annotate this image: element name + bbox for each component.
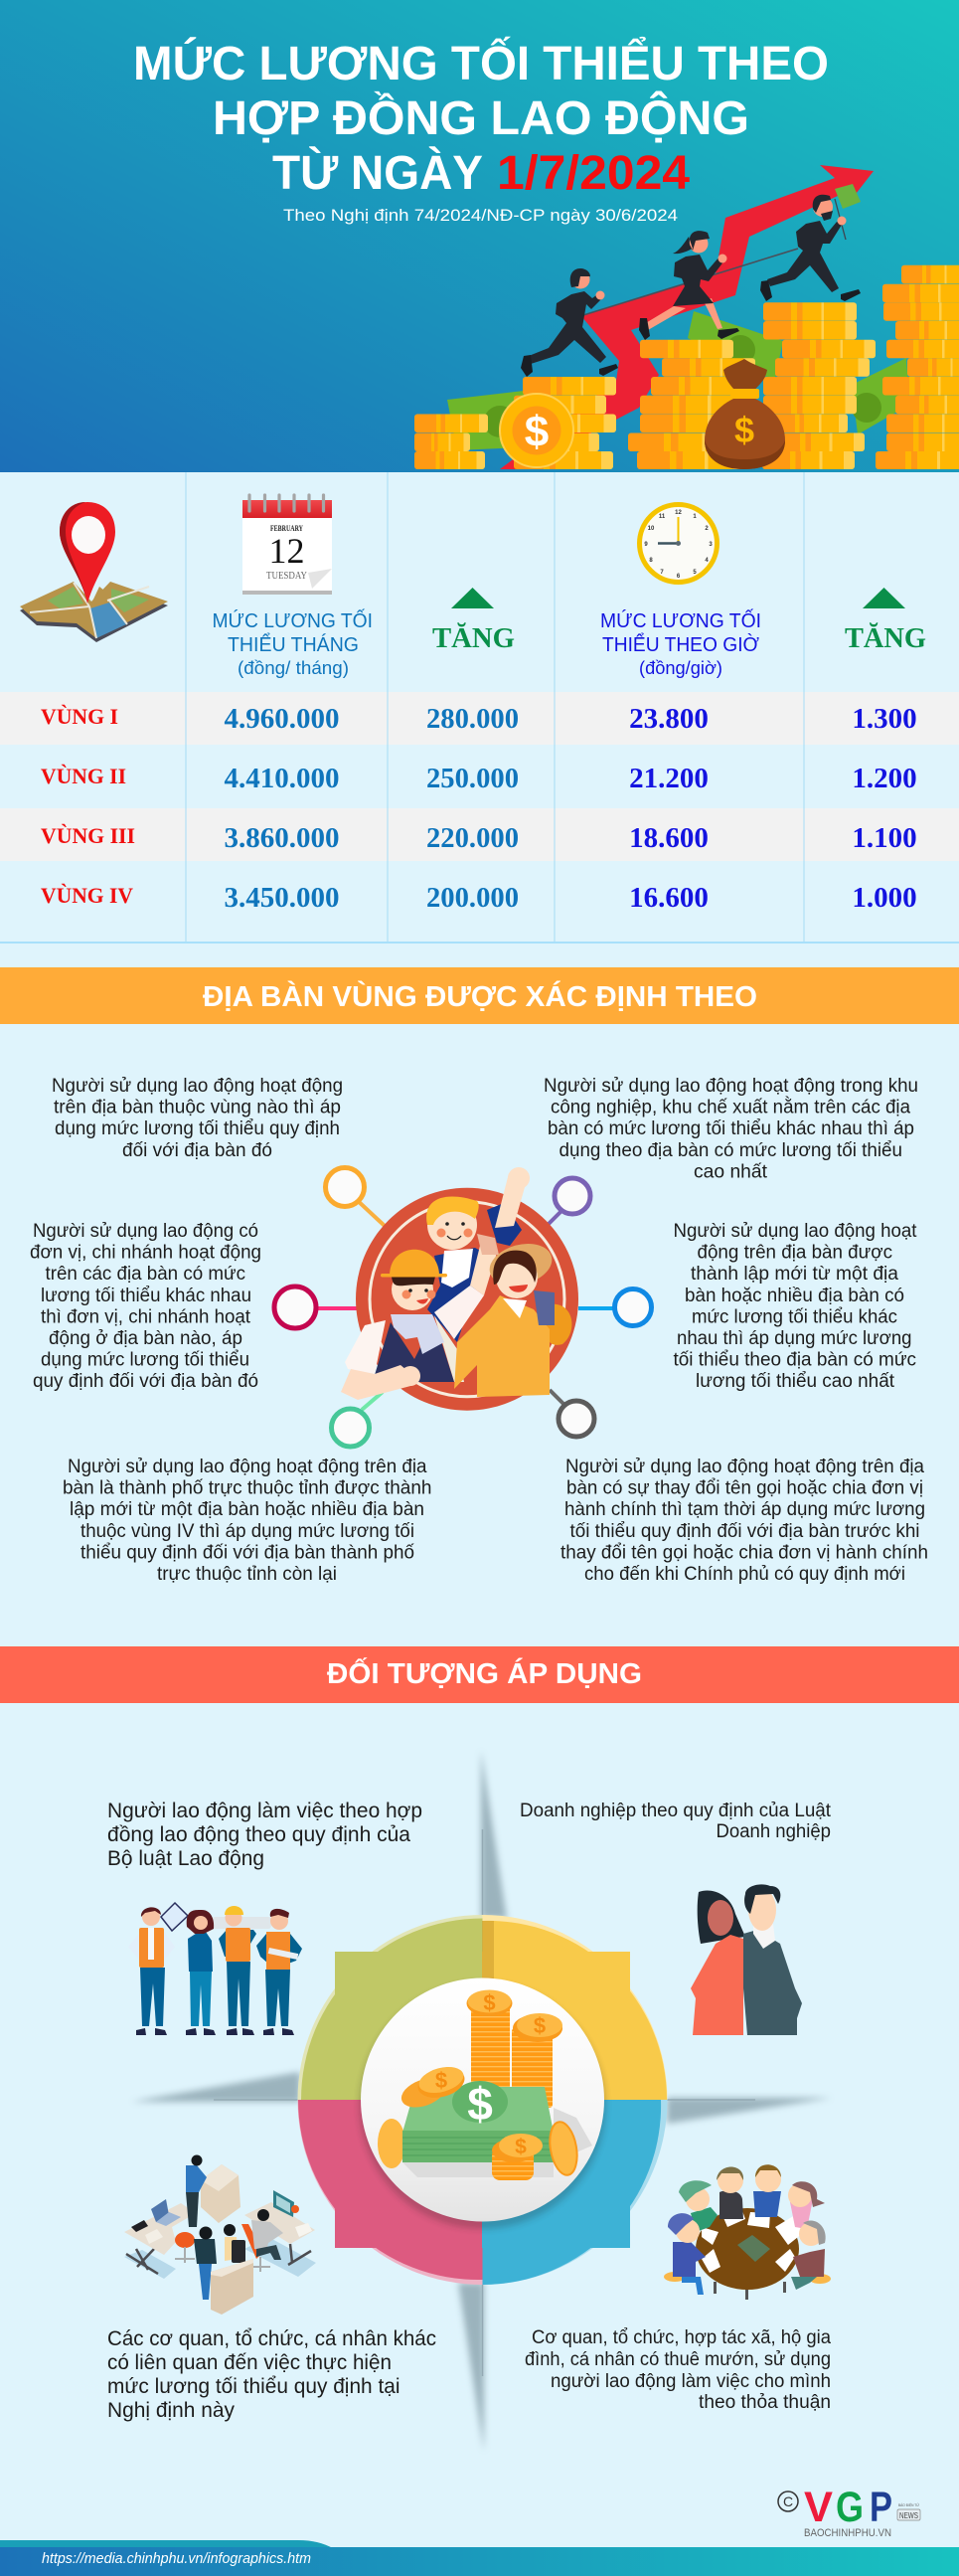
text block: rule 2: công nghiệp, khu chế xuất nằm trên các địa bbox=[551, 1097, 910, 1118]
text block: rule 5: Người sử dụng lao động hoạt động trên địa bbox=[68, 1457, 427, 1477]
text block: subject 1: Bộ luật Lao động bbox=[107, 1847, 264, 1870]
illustration: red growth arrow bbox=[500, 165, 874, 469]
row labels: regions bbox=[41, 704, 135, 908]
text block: rule 3: đơn vị, chi nhánh hoạt động bbox=[30, 1243, 261, 1264]
column values: hourly increase bbox=[852, 703, 917, 914]
text block: rule 6: cho đến khi Chính phủ có quy định mới bbox=[584, 1564, 905, 1585]
title: TỪ NGÀY bbox=[272, 145, 483, 200]
text block: subject 3: có liên quan đến việc thực hiện bbox=[107, 2351, 392, 2374]
column values: hourly wage: 21.200 bbox=[629, 763, 709, 794]
panel: applicable subjects diagram bbox=[107, 1750, 832, 2452]
icon: money and coins bbox=[378, 1990, 592, 2180]
column heading: hourly minimum wage bbox=[600, 608, 761, 678]
text block: rule 5 bbox=[63, 1457, 431, 1585]
title: 1/7/2024 bbox=[497, 147, 690, 200]
icon: meeting around table bbox=[664, 2164, 831, 2300]
icon: clock: 8 bbox=[649, 558, 653, 564]
table bbox=[0, 472, 959, 944]
column heading: increase (monthly) bbox=[432, 588, 515, 654]
text block: rule 2: Người sử dụng lao động hoạt động trong khu bbox=[544, 1076, 918, 1097]
quadrant: bottom left bbox=[298, 2100, 483, 2285]
column values: monthly wage: 4.410.000 bbox=[225, 763, 340, 794]
illustration: runner 1 bbox=[521, 268, 618, 377]
illustration: rope bbox=[583, 249, 798, 315]
text block: rule 6: hành chính thì tạm thời áp dụng mức lương bbox=[564, 1499, 925, 1520]
icon: money and coins: $ bbox=[467, 2078, 493, 2130]
divider shadows bbox=[131, 1750, 832, 2452]
VGP logo: P bbox=[870, 2484, 892, 2531]
section band: region determination bbox=[0, 967, 959, 1024]
worker 4 bbox=[256, 1909, 302, 2035]
icon: clock: 4 bbox=[705, 558, 709, 564]
icon: clock: 10 bbox=[648, 526, 655, 532]
connector nodes bbox=[274, 1167, 652, 1447]
worker 3 bbox=[219, 1906, 256, 2035]
column values: hourly increase: 1.300 bbox=[852, 703, 917, 735]
column values: monthly wage: 4.960.000 bbox=[225, 703, 340, 735]
title bbox=[133, 36, 829, 200]
icon: clock: 2 bbox=[705, 526, 709, 532]
column values: monthly increase: 250.000 bbox=[426, 763, 519, 794]
row labels: regions: VÙNG IV bbox=[41, 883, 133, 908]
worker in yellow sweater bbox=[454, 1237, 571, 1397]
column heading: monthly minimum wage: (đồng/ tháng) bbox=[238, 658, 349, 678]
text block: rule 4: động trên địa bàn được bbox=[698, 1243, 892, 1264]
column values: hourly increase: 1.100 bbox=[852, 822, 917, 854]
icon: clock: 11 bbox=[659, 514, 666, 520]
text block: rule 1: trên địa bàn thuộc vùng nào thì áp bbox=[54, 1098, 341, 1118]
VGP logo: C bbox=[783, 2493, 793, 2509]
text block: rule 3 bbox=[30, 1221, 261, 1392]
footer bar: https://media.chinhphu.vn/infographics.htm bbox=[42, 2550, 311, 2567]
row labels: regions: VÙNG II bbox=[41, 764, 126, 788]
panel: region rules hub diagram bbox=[30, 1076, 928, 1585]
column heading: monthly minimum wage: MỨC LƯƠNG TỐI bbox=[213, 608, 373, 632]
icon: clock bbox=[640, 505, 718, 583]
VGP logo: V bbox=[804, 2484, 833, 2531]
worker 2 bbox=[186, 1910, 216, 2035]
icon: office workplace bbox=[124, 2155, 316, 2315]
subtitle: Theo Nghị định 74/2024/NĐ-CP ngày 30/6/2024 bbox=[283, 206, 678, 225]
illustration: runner 3 with flag bbox=[760, 184, 861, 301]
column heading: hourly minimum wage: (đồng/giờ) bbox=[639, 658, 722, 678]
column values: hourly wage: 18.600 bbox=[629, 822, 709, 854]
column values: hourly wage: 16.600 bbox=[629, 882, 709, 914]
VGP logo: BÁO ĐIỆN TỬ bbox=[898, 2502, 919, 2507]
text block: rule 4: bàn hoặc nhiều địa bàn có bbox=[685, 1286, 904, 1306]
text block: rule 2: bàn có mức lương tối thiểu khác nhau thì áp bbox=[548, 1118, 914, 1139]
text block: rule 1: dụng mức lương tối thiểu quy định bbox=[55, 1118, 340, 1139]
text block: rule 5: lập mới từ một địa bàn hoặc nhiều địa bàn bbox=[70, 1499, 424, 1520]
illustration: runner 2 bbox=[639, 231, 739, 340]
text block: rule 3: thì đơn vị, chi nhánh hoạt bbox=[41, 1306, 251, 1327]
illustration: money bag: $ bbox=[734, 410, 754, 450]
icon: map with location pin bbox=[20, 502, 168, 642]
text block: rule 6: bàn có sự thay đổi tên gọi hoặc chia đơn vị bbox=[566, 1478, 923, 1499]
text block: rule 3: trên các địa bàn có mức bbox=[46, 1264, 245, 1285]
column heading: hourly minimum wage: MỨC LƯƠNG TỐI bbox=[600, 608, 761, 632]
text block: subject 3: Nghị định này bbox=[107, 2399, 235, 2422]
text block: subject 2: Doanh nghiệp bbox=[716, 1821, 831, 1842]
column heading: monthly minimum wage: THIỂU THÁNG bbox=[228, 633, 359, 656]
icon: calendar: TUESDAY bbox=[266, 570, 307, 582]
text block: rule 2 bbox=[544, 1076, 918, 1182]
section band: applicable subjects: ĐỐI TƯỢNG ÁP DỤNG bbox=[327, 1656, 642, 1690]
column values: monthly increase: 280.000 bbox=[426, 703, 519, 735]
illustration: banknotes bbox=[447, 311, 909, 450]
icon: calendar bbox=[242, 495, 332, 595]
worker in overalls bbox=[341, 1234, 499, 1400]
text block: subject 2 bbox=[520, 1801, 832, 1842]
icon: clock: 1 bbox=[693, 514, 697, 520]
illustration: gold coin bbox=[500, 394, 573, 467]
icon: clock: 3 bbox=[709, 542, 713, 548]
section band: applicable subjects bbox=[0, 1646, 959, 1703]
column heading: monthly minimum wage bbox=[213, 608, 373, 678]
text block: rule 3: Người sử dụng lao động có bbox=[33, 1221, 258, 1242]
text block: rule 3: quy định đối với địa bàn đó bbox=[33, 1371, 258, 1392]
text block: rule 5: thiểu quy định đối với địa bàn thành phố bbox=[80, 1542, 414, 1563]
quadrant: top left bbox=[298, 1915, 483, 2100]
text block: rule 6: thay đổi tên gọi hoặc chia đơn vị hành chính bbox=[560, 1542, 928, 1563]
text block: subject 4: Cơ quan, tổ chức, hợp tác xã, hộ gia bbox=[532, 2327, 831, 2348]
icon: money and coins: $ bbox=[515, 2136, 527, 2158]
VGP logo bbox=[778, 2484, 920, 2539]
column values: monthly wage bbox=[225, 703, 340, 914]
text block: rule 2: cao nhất bbox=[694, 1161, 768, 1182]
central illustration: three workers bbox=[341, 1167, 578, 1411]
text block: subject 3 bbox=[107, 2327, 436, 2422]
text block: subject 2: Doanh nghiệp theo quy định của Luật bbox=[520, 1801, 832, 1821]
text block: subject 3: Các cơ quan, tổ chức, cá nhân khác bbox=[107, 2327, 436, 2350]
column heading: hourly minimum wage: THIỂU THEO GIỜ bbox=[602, 633, 759, 656]
illustration: money bag bbox=[705, 359, 785, 469]
text block: rule 1: đối với địa bàn đó bbox=[122, 1140, 272, 1161]
text block: rule 3: lương tối thiểu khác nhau bbox=[41, 1286, 251, 1306]
column values: monthly increase: 220.000 bbox=[426, 822, 519, 854]
text block: subject 1: đồng lao động theo quy định của bbox=[107, 1823, 410, 1846]
icon: clock: 5 bbox=[693, 570, 697, 576]
text block: rule 4: mức lương tối thiểu khác bbox=[692, 1306, 897, 1327]
column heading: increase (hourly): TĂNG bbox=[845, 623, 926, 654]
icon: clock: 9 bbox=[644, 542, 648, 548]
icon: clock: 12 bbox=[675, 510, 682, 516]
text block: subject 1: Người lao động làm việc theo hợp bbox=[107, 1800, 422, 1822]
icon: calendar: 12 bbox=[268, 531, 304, 571]
title: HỢP ĐỒNG LAO ĐỘNG bbox=[213, 90, 749, 145]
text block: rule 4: thành lập mới từ một địa bbox=[691, 1264, 898, 1285]
text block: rule 4: lương tối thiểu cao nhất bbox=[696, 1371, 895, 1392]
column values: monthly wage: 3.860.000 bbox=[225, 822, 340, 854]
worker in blue bbox=[426, 1167, 530, 1342]
column values: hourly wage: 23.800 bbox=[629, 703, 709, 735]
text block: rule 4: Người sử dụng lao động hoạt bbox=[674, 1221, 917, 1242]
text block: rule 1 bbox=[52, 1076, 343, 1161]
text block: rule 1: Người sử dụng lao động hoạt động bbox=[52, 1076, 343, 1097]
footer bar bbox=[0, 2540, 959, 2576]
text block: subject 3: mức lương tối thiểu quy định tại bbox=[107, 2375, 400, 2398]
table zebra rows bbox=[0, 692, 959, 861]
quadrant: top right bbox=[482, 1915, 668, 2100]
text block: rule 5: thuộc vùng IV thì áp dụng mức lương tối bbox=[80, 1521, 414, 1542]
column heading: increase (monthly): TĂNG bbox=[432, 623, 515, 654]
icon: business couple bbox=[691, 1884, 802, 2035]
central white circle bbox=[360, 1978, 606, 2229]
column values: monthly wage: 3.450.000 bbox=[225, 882, 340, 914]
icon: clock: 6 bbox=[677, 574, 681, 580]
text block: rule 6 bbox=[560, 1457, 928, 1585]
text block: subject 1 bbox=[107, 1800, 422, 1870]
text block: rule 4: nhau thì áp dụng mức lương bbox=[677, 1328, 912, 1349]
column values: hourly increase: 1.200 bbox=[852, 763, 917, 794]
column heading: increase (hourly) bbox=[845, 588, 926, 654]
worker 1 bbox=[128, 1907, 175, 2035]
text block: rule 6: Người sử dụng lao động hoạt động trên địa bbox=[565, 1457, 924, 1477]
icon: four workers bbox=[128, 1903, 302, 2035]
VGP logo: G bbox=[836, 2484, 864, 2531]
text block: subject 4: đình, cá nhân có thuê mướn, sử dụng bbox=[525, 2349, 831, 2370]
text block: subject 4: người lao động làm việc cho mình bbox=[551, 2371, 831, 2392]
text block: subject 4 bbox=[525, 2327, 831, 2413]
column values: hourly increase: 1.000 bbox=[852, 882, 917, 914]
icon: calendar: FEBRUARY bbox=[270, 524, 303, 533]
column values: monthly increase: 200.000 bbox=[426, 882, 519, 914]
section band: region determination: ĐỊA BÀN VÙNG ĐƯỢC XÁC ĐỊNH THEO bbox=[203, 979, 757, 1013]
text block: rule 3: động ở địa bàn nào, áp bbox=[49, 1328, 242, 1349]
column values: hourly wage bbox=[629, 703, 709, 914]
text block: rule 6: tối thiểu quy định đối với địa bàn trước khi bbox=[570, 1521, 920, 1542]
icon: money and coins: $ bbox=[435, 2068, 447, 2093]
row labels: regions: VÙNG I bbox=[41, 704, 118, 729]
illustration: gold coin: $ bbox=[525, 408, 549, 456]
icon: money and coins: $ bbox=[483, 1990, 496, 2015]
VGP logo: NEWS bbox=[899, 2511, 918, 2520]
icon: clock: 7 bbox=[660, 570, 664, 576]
text block: rule 5: bàn là thành phố trực thuộc tỉnh được thành bbox=[63, 1478, 431, 1499]
illustration: coin stacks bbox=[414, 265, 959, 469]
text block: rule 4 bbox=[674, 1221, 917, 1392]
text block: rule 5: trực thuộc tỉnh còn lại bbox=[157, 1564, 337, 1585]
icon: money and coins: $ bbox=[534, 2013, 546, 2038]
quadrant: bottom right bbox=[482, 2100, 668, 2285]
text block: rule 3: dụng mức lương tối thiểu bbox=[41, 1350, 249, 1371]
VGP logo: BAOCHINHPHU.VN bbox=[804, 2527, 891, 2539]
column values: monthly increase bbox=[426, 703, 519, 914]
text block: rule 2: dụng theo địa bàn có mức lương tối thiểu bbox=[559, 1140, 902, 1161]
header banner bbox=[0, 0, 959, 472]
title: MỨC LƯƠNG TỐI THIỂU THEO bbox=[133, 36, 829, 90]
text block: subject 4: theo thỏa thuận bbox=[699, 2392, 831, 2413]
row labels: regions: VÙNG III bbox=[41, 823, 135, 848]
text block: rule 4: tối thiểu theo địa bàn có mức bbox=[674, 1350, 916, 1371]
